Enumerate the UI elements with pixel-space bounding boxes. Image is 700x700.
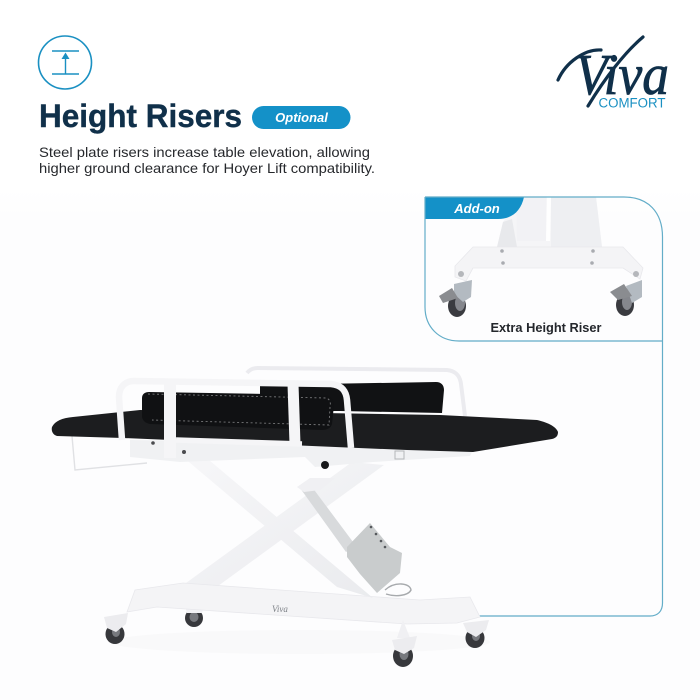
motor housing	[347, 523, 411, 596]
actuator	[300, 483, 356, 552]
description text: Steel plate risers increase table elevation, allowing	[39, 144, 370, 160]
actuator bracket	[297, 478, 335, 492]
caster left	[439, 271, 472, 317]
icon: height arrow in circle	[38, 36, 92, 89]
product: adjustable changing table	[52, 368, 558, 667]
back bolster	[260, 382, 444, 413]
tab: add-on: Add-on	[453, 201, 500, 216]
mattress	[52, 410, 558, 452]
riser upright photo	[455, 197, 643, 281]
tab: add-on	[425, 197, 524, 219]
caption: extra height riser: Extra Height Riser	[490, 321, 602, 335]
description text: higher ground clearance for Hoyer Lift compatibility.	[39, 160, 375, 176]
caster front left	[104, 613, 128, 644]
inset panel: add-on riser	[425, 197, 643, 335]
floor shadow	[110, 630, 490, 654]
description text	[39, 144, 375, 176]
logo: Viva Comfort: COMFORT	[598, 96, 666, 110]
badge: optional	[252, 106, 350, 129]
logo: Viva Comfort: Viva	[575, 42, 669, 107]
base logo text: Viva	[272, 604, 288, 614]
heading: Height Risers	[39, 98, 242, 134]
back rail	[247, 368, 465, 416]
connector line from panel to base	[425, 197, 662, 619]
caster front centre	[392, 620, 417, 667]
caster right	[610, 271, 642, 316]
badge: optional: Optional	[275, 110, 328, 125]
base frame	[127, 583, 480, 624]
under-deck frame	[72, 436, 473, 470]
scissor beam front	[183, 455, 373, 598]
front rail	[119, 381, 351, 458]
caster front right	[463, 620, 489, 648]
scissor beam rear	[186, 462, 384, 586]
front bolster with stitching	[142, 392, 334, 430]
rear caster	[185, 606, 204, 627]
